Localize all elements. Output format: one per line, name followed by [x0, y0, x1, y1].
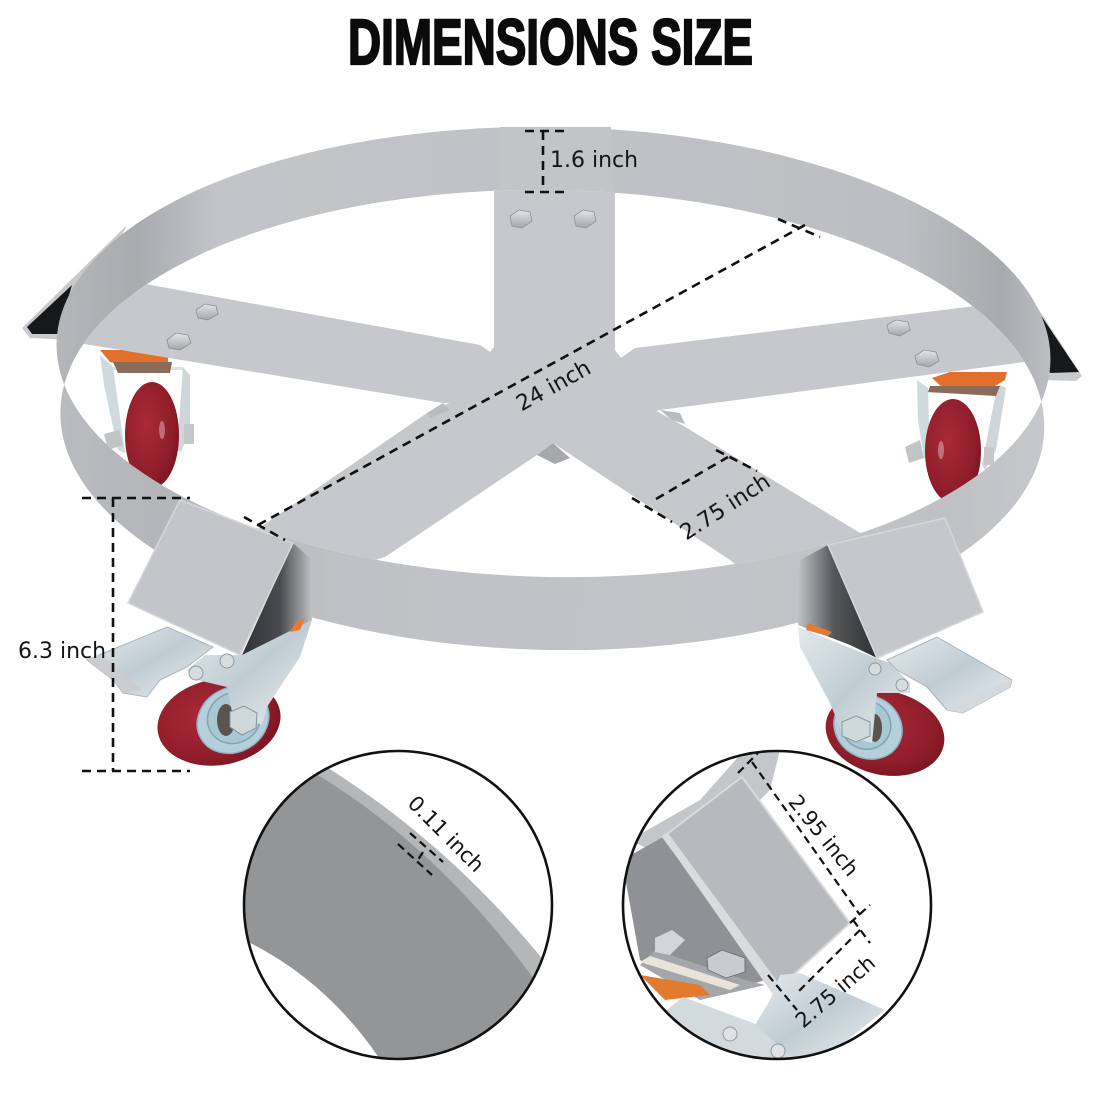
- detail circle: plate thickness: [240, 751, 560, 1070]
- small clamp bolt: [655, 930, 685, 955]
- axle bolt: [842, 716, 870, 742]
- title: DIMENSIONS SIZE: [348, 6, 753, 78]
- 2.75 inch arm dimension: 2.75 inch: [676, 469, 775, 546]
- latch metal: [663, 997, 793, 1060]
- fork: [187, 620, 312, 725]
- front right caster: [798, 627, 1012, 787]
- center tab: [537, 443, 570, 464]
- pivot rivets: [189, 666, 203, 680]
- bracket cavity: [622, 837, 765, 1000]
- detail circle: bracket size: 2.75 inch: [791, 951, 880, 1033]
- rear left caster: [100, 350, 194, 488]
- metal strip: [310, 768, 545, 985]
- inner bolt: [707, 950, 745, 978]
- wheel: [150, 669, 288, 775]
- spoke plates: [84, 190, 1024, 564]
- front right bracket: [798, 518, 983, 658]
- brake pedal: [887, 637, 1012, 713]
- 6.3 inch height dimension: 6.3 inch: [18, 639, 106, 664]
- ring band: [53, 118, 1054, 659]
- 1.6 inch dimension: [525, 131, 638, 192]
- bracket plate: [663, 777, 850, 990]
- pivot rivets: [869, 663, 881, 675]
- front left caster: [87, 620, 312, 775]
- 24 inch dimension: [244, 219, 820, 540]
- front left bracket: [128, 500, 312, 655]
- ring interior with rear casters and spokes: [64, 190, 1042, 578]
- right tab: [660, 410, 685, 424]
- detail circle: bracket size: 2.95 inch: [783, 790, 863, 881]
- hub: [822, 683, 914, 771]
- size dashes: [738, 753, 870, 1010]
- orange bearing: [640, 975, 710, 1000]
- brake pedal: [87, 627, 213, 697]
- bolts on spokes: [167, 210, 939, 367]
- lip: [662, 833, 782, 993]
- 2.75 inch arm dimension: [632, 450, 775, 546]
- circle outline: [244, 751, 552, 1059]
- hub: [185, 674, 281, 766]
- left rear bracket: [22, 225, 127, 340]
- circle outline: [623, 751, 931, 1059]
- wheel: [818, 679, 952, 787]
- ring behind bracket: [637, 752, 780, 848]
- detail circle: plate thickness: 0.11 inch: [403, 791, 489, 877]
- 6.3 inch height dimension: [18, 498, 190, 771]
- detail circle: bracket size: [622, 750, 931, 1060]
- fork: [798, 627, 910, 743]
- 24 inch dimension: 24 inch: [512, 356, 595, 417]
- thickness ticks: [398, 833, 443, 875]
- right rear bracket: [1030, 296, 1082, 381]
- axle bolt: [230, 706, 257, 735]
- left tab: [427, 403, 450, 418]
- rear right caster: [905, 372, 1007, 503]
- 1.6 inch dimension: 1.6 inch: [550, 148, 638, 173]
